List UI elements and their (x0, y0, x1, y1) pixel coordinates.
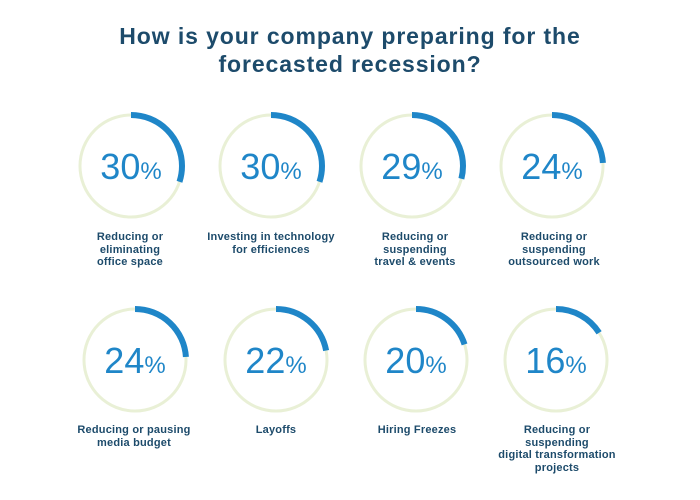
chart: 29% travel: 29% (381, 146, 443, 187)
label: digital: Reducing or (524, 424, 590, 436)
chart: 29% travel (361, 115, 463, 217)
label: digital: suspending (525, 436, 589, 448)
label: media (77, 424, 191, 448)
label: travel: suspending (383, 244, 447, 256)
chart: 30% technology (220, 115, 322, 217)
chart: 16% digital (505, 309, 607, 411)
label: digital (498, 424, 616, 474)
label: media: media budget (97, 436, 171, 448)
label: travel: Reducing or (382, 231, 448, 243)
label: layoffs: Layoffs (256, 424, 296, 436)
label: outsourced: Reducing or (521, 231, 587, 243)
chart: 24% outsourced: 24% (521, 146, 583, 187)
label: media: Reducing or pausing (77, 424, 191, 436)
title (119, 23, 581, 77)
label: technology (207, 231, 335, 256)
label: digital: projects (535, 462, 579, 474)
chart: 30% technology: 30% (240, 146, 302, 187)
chart: 22% layoffs: 22% (245, 340, 307, 381)
chart: 24% outsourced (501, 115, 603, 217)
label: outsourced (508, 231, 600, 268)
label: office space: office space (97, 256, 163, 268)
label: technology: for efficiences (232, 244, 310, 256)
label: travel: travel & events (374, 256, 456, 268)
label: office space: Reducing or (97, 231, 163, 243)
chart: 30% office space: 30% (100, 146, 162, 187)
label: technology: Investing in technology (207, 231, 335, 243)
title: forecasted recession? (218, 51, 482, 77)
label: outsourced: outsourced work (508, 256, 600, 268)
chart: 20% hiring (365, 309, 467, 411)
label: travel (374, 231, 456, 268)
label: office space (97, 231, 163, 268)
title: How is your company preparing for the (119, 23, 581, 49)
label: digital: digital transformation (498, 449, 616, 461)
chart: 30% office space (80, 115, 182, 217)
chart: 24% media: 24% (104, 340, 166, 381)
label: outsourced: suspending (522, 244, 586, 256)
label: office space: eliminating (100, 244, 160, 256)
label: hiring: Hiring Freezes (378, 424, 456, 436)
chart: 20% hiring: 20% (385, 340, 447, 381)
chart: 22% layoffs (225, 309, 327, 411)
chart: 24% media (84, 309, 186, 411)
chart: 16% digital: 16% (525, 340, 587, 381)
